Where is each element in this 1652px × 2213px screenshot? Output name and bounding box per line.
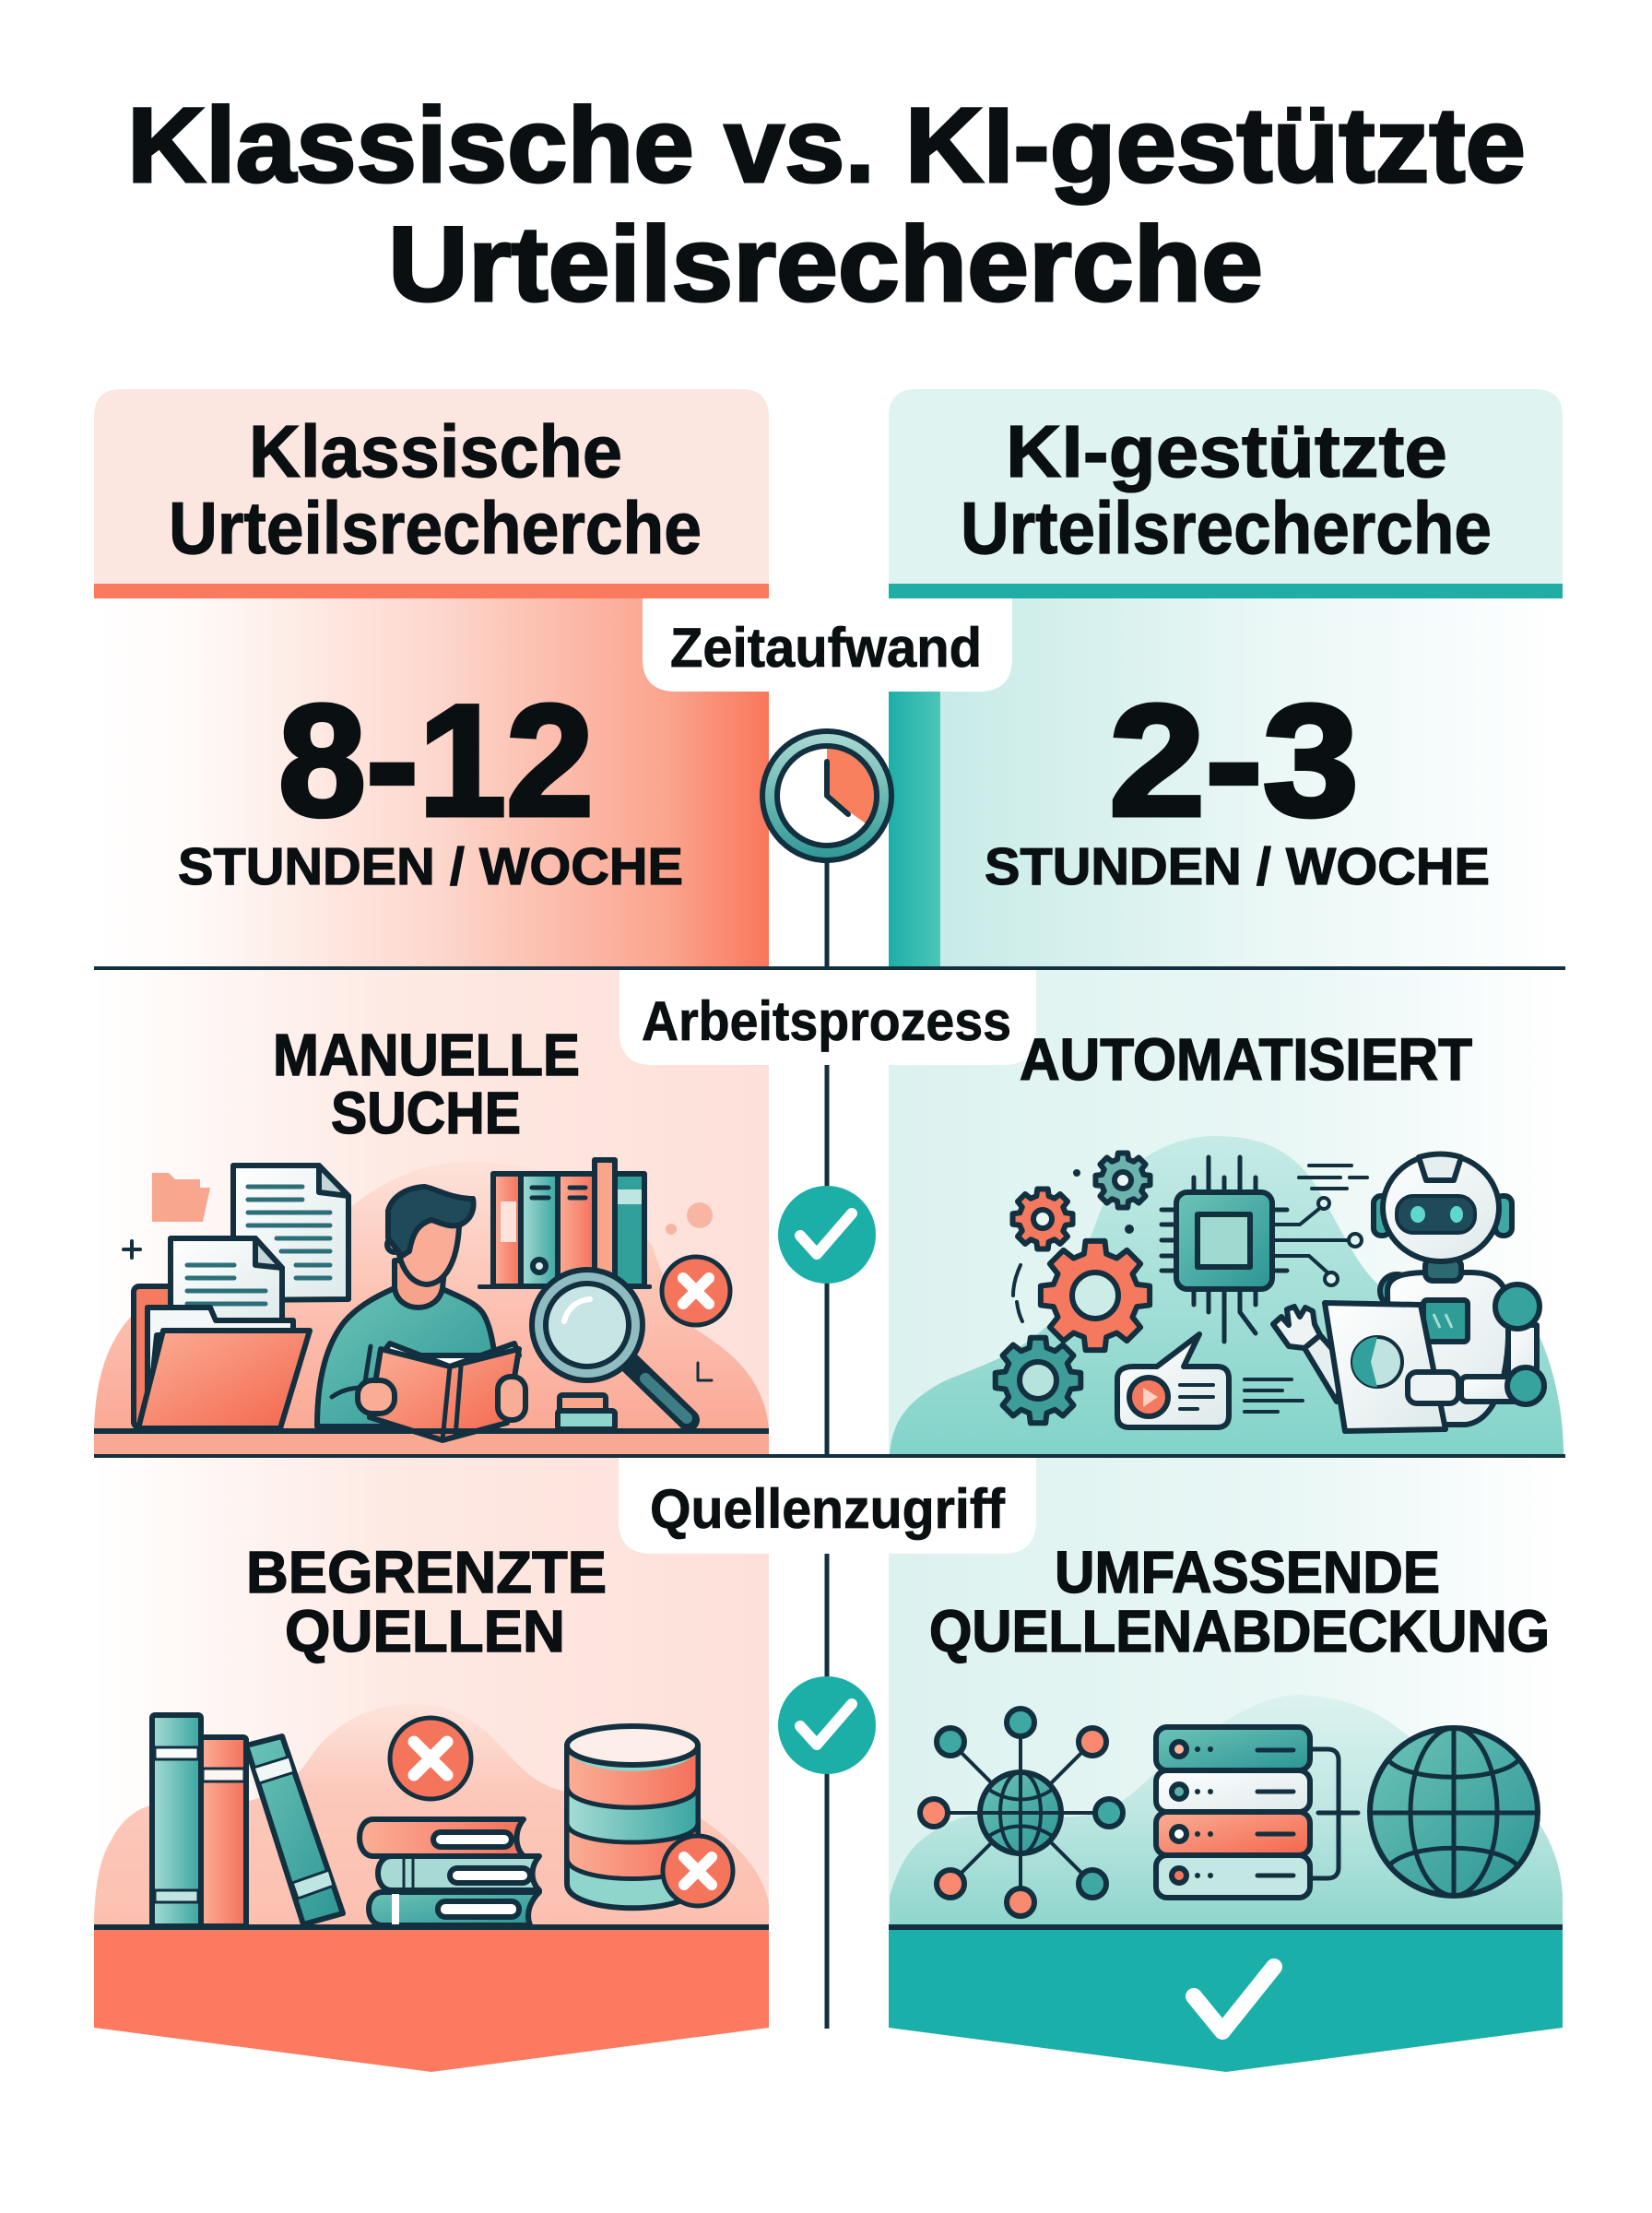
panel: time classic bbox=[94, 598, 769, 966]
label pill: Zeitaufwand: Zeitaufwand bbox=[670, 617, 982, 679]
label pill: Quellenzugriff bbox=[619, 1458, 1036, 1554]
heading: umfassende quellenabdeckung bbox=[929, 1539, 1550, 1664]
panel: sources AI background bbox=[889, 1458, 1563, 1928]
illustration: comprehensive sources bbox=[890, 1695, 1563, 1925]
icon: shelf of binders bbox=[478, 1160, 652, 1289]
illustration: limited sources bbox=[94, 1704, 769, 1926]
banner: AI base with check bbox=[889, 1930, 1563, 2072]
illustration: automated bbox=[890, 1136, 1564, 1454]
label pill: Arbeitsprozess bbox=[620, 970, 1036, 1065]
icon: x badge database bbox=[663, 1836, 733, 1906]
icon: clock bbox=[762, 731, 891, 860]
banner: classic base bbox=[94, 1930, 769, 2072]
label pill: Zeitaufwand bbox=[643, 598, 1012, 692]
icon: folder with front document bbox=[134, 1238, 310, 1428]
icon: check circle process bbox=[778, 1186, 876, 1284]
heading: manuelle suche: MANUELLE bbox=[273, 1022, 580, 1088]
base line classic bbox=[94, 1924, 769, 1930]
panel: process classic background bbox=[94, 970, 769, 1454]
heading: manuelle suche bbox=[273, 1022, 580, 1146]
icon: network globe bbox=[920, 1709, 1123, 1916]
heading: begrenzte quellen bbox=[246, 1539, 607, 1664]
icon: x badge center bbox=[390, 1718, 471, 1799]
title: Urteilsrecherche bbox=[388, 206, 1263, 324]
label pill: Quellenzugriff: Quellenzugriff bbox=[650, 1478, 1006, 1540]
heading: begrenzte quellen: QUELLEN bbox=[285, 1598, 565, 1664]
icon: check circle sources bbox=[778, 1676, 876, 1774]
heading: umfassende quellenabdeckung: UMFASSENDE bbox=[1055, 1539, 1440, 1605]
icon: person reading bbox=[317, 1187, 525, 1440]
illustration: manual search bbox=[94, 1160, 769, 1454]
icon: back document bbox=[233, 1166, 348, 1300]
icon: database bbox=[567, 1726, 698, 1908]
panel: time AI: 2-3 bbox=[1109, 672, 1359, 849]
base line AI bbox=[889, 1924, 1563, 1930]
heading: begrenzte quellen: BEGRENZTE bbox=[246, 1539, 607, 1605]
icon: magnifying glass bbox=[532, 1270, 689, 1420]
title bbox=[127, 87, 1526, 324]
panel: time classic: STUNDEN / WOCHE bbox=[178, 837, 683, 896]
panel: header classic: Klassische bbox=[249, 410, 622, 492]
heading: manuelle suche: SUCHE bbox=[331, 1080, 521, 1146]
table line bbox=[94, 1428, 769, 1434]
panel: process AI background bbox=[889, 970, 1563, 1454]
icon: chip bbox=[1162, 1157, 1367, 1342]
panel: header AI bbox=[889, 389, 1563, 598]
decorative marks bbox=[124, 1202, 713, 1380]
icon: standing books bbox=[152, 1715, 343, 1926]
panel: time classic: 8-12 bbox=[278, 672, 594, 849]
heading: automatisiert: AUTOMATISIERT bbox=[1020, 1026, 1472, 1093]
title: Klassische vs. KI-gestützte bbox=[127, 87, 1526, 205]
panel: time AI: STUNDEN / WOCHE bbox=[985, 837, 1490, 896]
panel: header AI: Urteilsrecherche bbox=[961, 487, 1492, 569]
panel: header classic bbox=[94, 389, 769, 598]
icon: stacked books bbox=[360, 1819, 539, 1925]
icon: stamp bbox=[558, 1395, 615, 1429]
heading: umfassende quellenabdeckung: QUELLENABDECKUNG bbox=[929, 1598, 1550, 1664]
icon: robot bbox=[1273, 1154, 1544, 1431]
panel: header AI: KI-gestützte bbox=[1006, 410, 1447, 492]
label pill: Arbeitsprozess: Arbeitsprozess bbox=[642, 990, 1011, 1052]
icon: server stack bbox=[1156, 1727, 1358, 1898]
panel: header classic: Urteilsrecherche bbox=[169, 487, 702, 569]
row divider lines bbox=[94, 966, 1565, 1458]
icon: small folder bbox=[152, 1173, 210, 1222]
panel: time AI bbox=[889, 598, 1563, 966]
panel: sources classic background bbox=[94, 1458, 769, 1928]
icon: x badge bbox=[662, 1257, 730, 1325]
icon: gears bbox=[996, 1153, 1150, 1423]
icon: speech bubble bbox=[1117, 1334, 1303, 1427]
center divider line bbox=[824, 858, 830, 2029]
icon: globe bbox=[1370, 1728, 1538, 1896]
